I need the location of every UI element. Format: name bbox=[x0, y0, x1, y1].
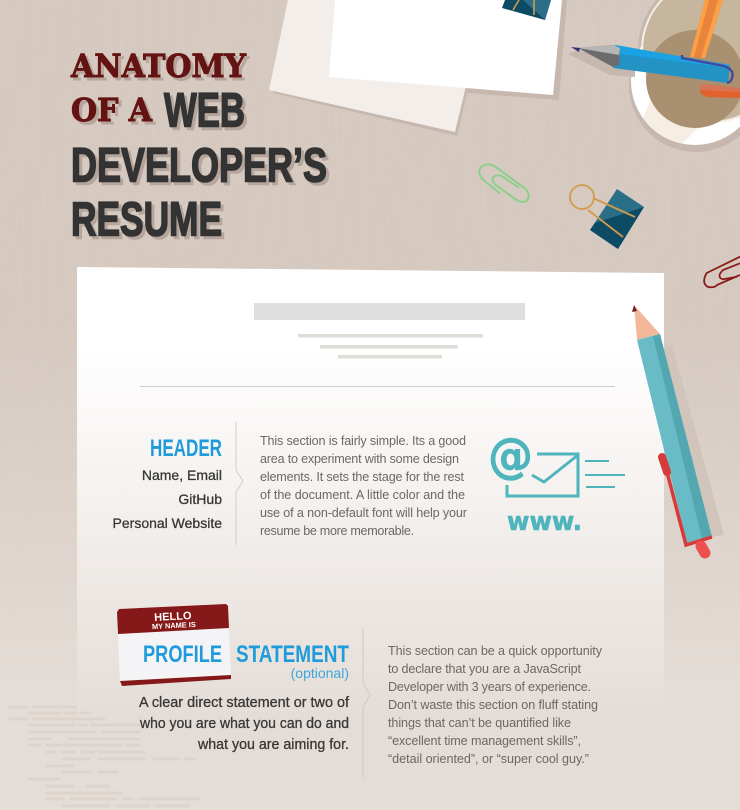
title: RESUME bbox=[71, 194, 222, 246]
profile description: This section can be a quick opportunity bbox=[388, 644, 603, 658]
section: profile statement bbox=[117, 604, 603, 778]
profile description: to declare that you are a JavaScript bbox=[388, 662, 582, 676]
big teal pencil bbox=[632, 305, 724, 553]
title: OF A bbox=[74, 94, 156, 132]
header checklist: Personal Website bbox=[113, 515, 222, 531]
title: DEVELOPER’S bbox=[71, 140, 327, 192]
heading: header: HEADER bbox=[150, 435, 222, 462]
heading: profile statement: (optional) bbox=[291, 665, 349, 681]
header description: of the document. A little color and the bbox=[260, 488, 465, 502]
icon: email and www bbox=[488, 428, 625, 537]
profile summary: what you are aiming for. bbox=[197, 737, 349, 753]
title: RESUME bbox=[74, 196, 225, 250]
profile description bbox=[388, 644, 603, 766]
blue pen bbox=[568, 45, 733, 83]
title: WEB bbox=[164, 84, 245, 138]
header description: use of a non-default font will help your bbox=[260, 506, 467, 520]
icon: binder clip bbox=[570, 185, 644, 249]
icon: green paperclip bbox=[479, 164, 529, 202]
profile summary bbox=[139, 695, 350, 753]
title bbox=[70, 47, 330, 250]
header description: area to experiment with some design bbox=[260, 452, 459, 466]
title: DEVELOPER’S bbox=[74, 142, 330, 196]
icon: red paperclip bbox=[704, 257, 740, 287]
heading: profile statement: STATEMENT bbox=[236, 641, 349, 668]
profile summary: A clear direct statement or two of bbox=[139, 695, 350, 711]
profile description: “excellent time management skills”, bbox=[388, 734, 581, 748]
title: ANATOMY bbox=[73, 50, 250, 88]
heading: profile statement bbox=[143, 641, 349, 681]
profile description: “detail oriented”, or “super cool guy.” bbox=[388, 752, 589, 766]
icon: email and www: @ bbox=[488, 428, 533, 484]
header description: resume be more memorable. bbox=[260, 524, 414, 538]
icon: name badge: HELLO bbox=[154, 610, 192, 624]
stacked papers bbox=[269, 0, 567, 136]
profile description: things that can’t be quantified like bbox=[388, 716, 571, 730]
title: ANATOMY bbox=[70, 47, 247, 85]
title: WEB bbox=[167, 88, 248, 140]
divider arrow bbox=[236, 422, 243, 545]
profile summary: who you are what you can do and bbox=[139, 716, 349, 732]
orange pencil in mug bbox=[690, 0, 723, 58]
title: OF A bbox=[71, 91, 153, 129]
resume paper bbox=[77, 267, 664, 720]
icon: email and www: www. bbox=[507, 507, 582, 537]
header description: This section is fairly simple. Its a good bbox=[260, 434, 466, 448]
red pencil in mug bbox=[700, 84, 740, 98]
profile description: Don’t waste this section on fluff stating bbox=[388, 698, 598, 712]
binder clip on paper bbox=[502, 0, 551, 20]
section: header bbox=[113, 422, 625, 545]
header description bbox=[260, 434, 467, 538]
header checklist: Name, Email bbox=[142, 467, 222, 483]
header checklist: GitHub bbox=[178, 491, 222, 507]
resume header placeholder bbox=[140, 303, 615, 387]
header checklist bbox=[113, 467, 222, 531]
icon: name badge bbox=[117, 604, 231, 686]
divider arrow bbox=[363, 629, 370, 778]
code lines background bbox=[9, 706, 200, 807]
coffee mug bbox=[629, 0, 740, 152]
icon: name badge: MY NAME IS bbox=[152, 620, 196, 631]
profile description: Developer with 3 years of experience. bbox=[388, 680, 591, 694]
header description: elements. It sets the stage for the rest bbox=[260, 470, 464, 484]
heading: profile statement: PROFILE bbox=[143, 641, 222, 668]
